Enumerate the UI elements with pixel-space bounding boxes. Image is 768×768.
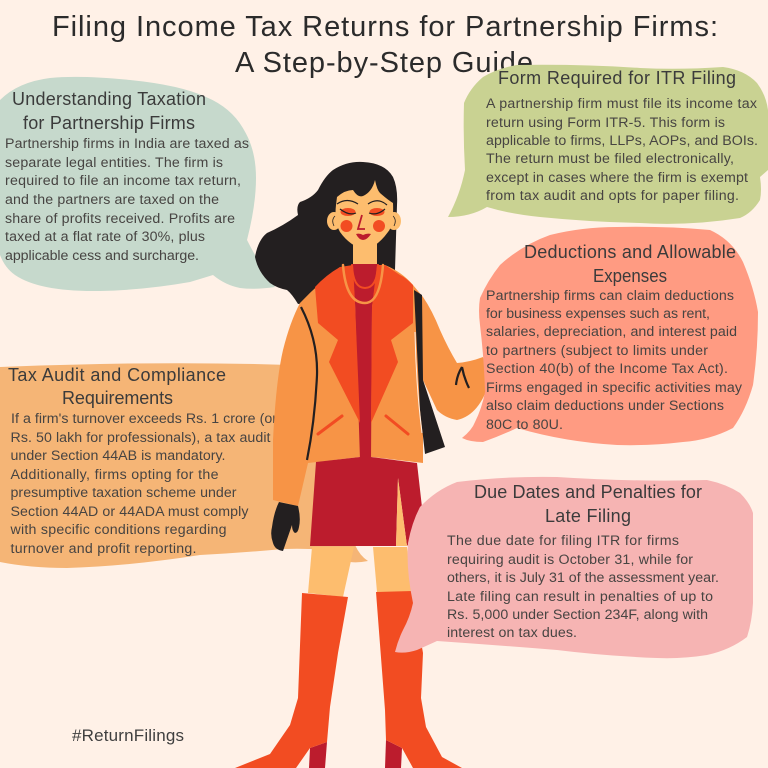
hair	[255, 162, 397, 304]
neck	[353, 240, 377, 267]
glove	[271, 502, 300, 551]
heading: Late Filing	[545, 506, 631, 526]
heading: Tax Audit and Compliance	[8, 365, 226, 385]
body text: Partnership firms can claim deductions	[486, 288, 734, 304]
body text	[486, 96, 758, 204]
body text: others, it is July 31 of the assessment year.	[447, 570, 719, 586]
ears	[327, 212, 401, 230]
heading: Requirements	[62, 388, 173, 408]
red dress top	[352, 264, 378, 460]
title	[52, 11, 718, 79]
body text: under Section 44AB is mandatory.	[10, 448, 226, 464]
body text: Firms engaged in specific activities may	[486, 380, 743, 396]
slit	[396, 478, 407, 546]
body text: If a firm's turnover exceeds Rs. 1 crore (or	[11, 411, 277, 427]
necklace	[343, 265, 383, 303]
panel: due dates and penalties	[395, 477, 753, 658]
heading	[474, 482, 702, 526]
panel: deductions and allowable expenses	[462, 227, 758, 445]
body text: 80C to 80U.	[486, 417, 563, 433]
body text: and the partners are taxed on the	[5, 192, 219, 208]
body text: Partnership firms in India are taxed as	[5, 136, 249, 152]
left sleeve and coat	[273, 265, 490, 506]
body text: Rs. 50 lakh for professionals), a tax audit	[10, 430, 271, 446]
panel: tax audit and compliance	[0, 363, 368, 568]
title: Filing Income Tax Returns for Partnership Firms:	[52, 11, 718, 43]
hashtag: #ReturnFilings	[72, 726, 184, 745]
body text: The return must be filed electronically,	[486, 151, 734, 167]
body text	[5, 136, 249, 264]
heading	[8, 365, 226, 408]
green speech bubble	[448, 65, 768, 224]
heading: Understanding Taxation	[12, 89, 206, 109]
body text: separate legal entities. The firm is	[5, 155, 223, 171]
body text: Additionally, firms opting for the	[10, 467, 219, 483]
body text: turnover and profit reporting.	[10, 541, 196, 557]
body text: except in cases where the firm is exempt	[486, 170, 748, 186]
body text: applicable to firms, LLPs, AOPs, and BOIs.	[486, 133, 758, 149]
body text: taxed at a flat rate of 30%, plus	[5, 229, 205, 245]
body text: for business expenses such as rent,	[486, 306, 710, 322]
body text: applicable cess and surcharge.	[5, 248, 199, 264]
body text: to partners (subject to limits under	[486, 343, 708, 359]
heading	[524, 242, 736, 286]
salmon speech bubble	[462, 227, 758, 445]
body text: requiring audit is October 31, while for	[447, 552, 693, 568]
body text: Section 44AD or 44ADA must comply	[10, 504, 249, 520]
body text: Late filing can result in penalties of up to	[447, 589, 713, 605]
heading: Form Required for ITR Filing	[498, 68, 736, 88]
body text	[486, 288, 743, 433]
body text: Section 40(b) of the Income Tax Act).	[486, 361, 728, 377]
panel: form required	[448, 65, 768, 224]
heels	[309, 740, 402, 768]
title: A Step-by-Step Guide	[235, 47, 533, 79]
face	[336, 180, 393, 250]
body text: required to file an income tax return,	[5, 173, 241, 189]
body text: also claim deductions under Sections	[486, 398, 724, 414]
pink speech bubble	[395, 477, 753, 658]
body text: return using Form ITR-5. This form is	[486, 115, 725, 131]
body text: presumptive taxation scheme under	[10, 485, 237, 501]
body text: A partnership firm must file its income tax	[486, 96, 757, 112]
legs	[308, 547, 412, 597]
illustration: woman in orange coat	[235, 162, 490, 768]
skirt	[310, 457, 424, 546]
panel: understanding taxation	[0, 77, 275, 291]
nose and mouth	[356, 215, 371, 240]
body text: Rs. 5,000 under Section 234F, along with	[447, 607, 708, 623]
heading: Due Dates and Penalties for	[474, 482, 702, 502]
lapels	[315, 265, 413, 423]
heading: Expenses	[593, 266, 667, 286]
coat seam lines	[301, 307, 469, 460]
body text: The due date for filing ITR for firms	[447, 533, 679, 549]
body text	[10, 411, 277, 557]
teal speech bubble	[0, 77, 275, 291]
body text: salaries, depreciation, and interest paid	[486, 324, 737, 340]
body text	[447, 533, 719, 641]
boots	[235, 591, 462, 768]
body text: share of profits received. Profits are	[5, 211, 235, 227]
heading	[12, 89, 206, 133]
bag	[414, 290, 445, 454]
heading: for Partnership Firms	[23, 113, 195, 133]
orange speech bubble	[0, 363, 368, 568]
body text: from tax audit and opts for paper filing.	[486, 188, 739, 204]
body text: interest on tax dues.	[447, 625, 577, 641]
eyes and cheeks	[337, 200, 387, 232]
pockets	[318, 416, 408, 434]
body text: with specific conditions regarding	[10, 522, 226, 538]
bag highlight	[415, 332, 422, 433]
heading: Deductions and Allowable	[524, 242, 736, 262]
